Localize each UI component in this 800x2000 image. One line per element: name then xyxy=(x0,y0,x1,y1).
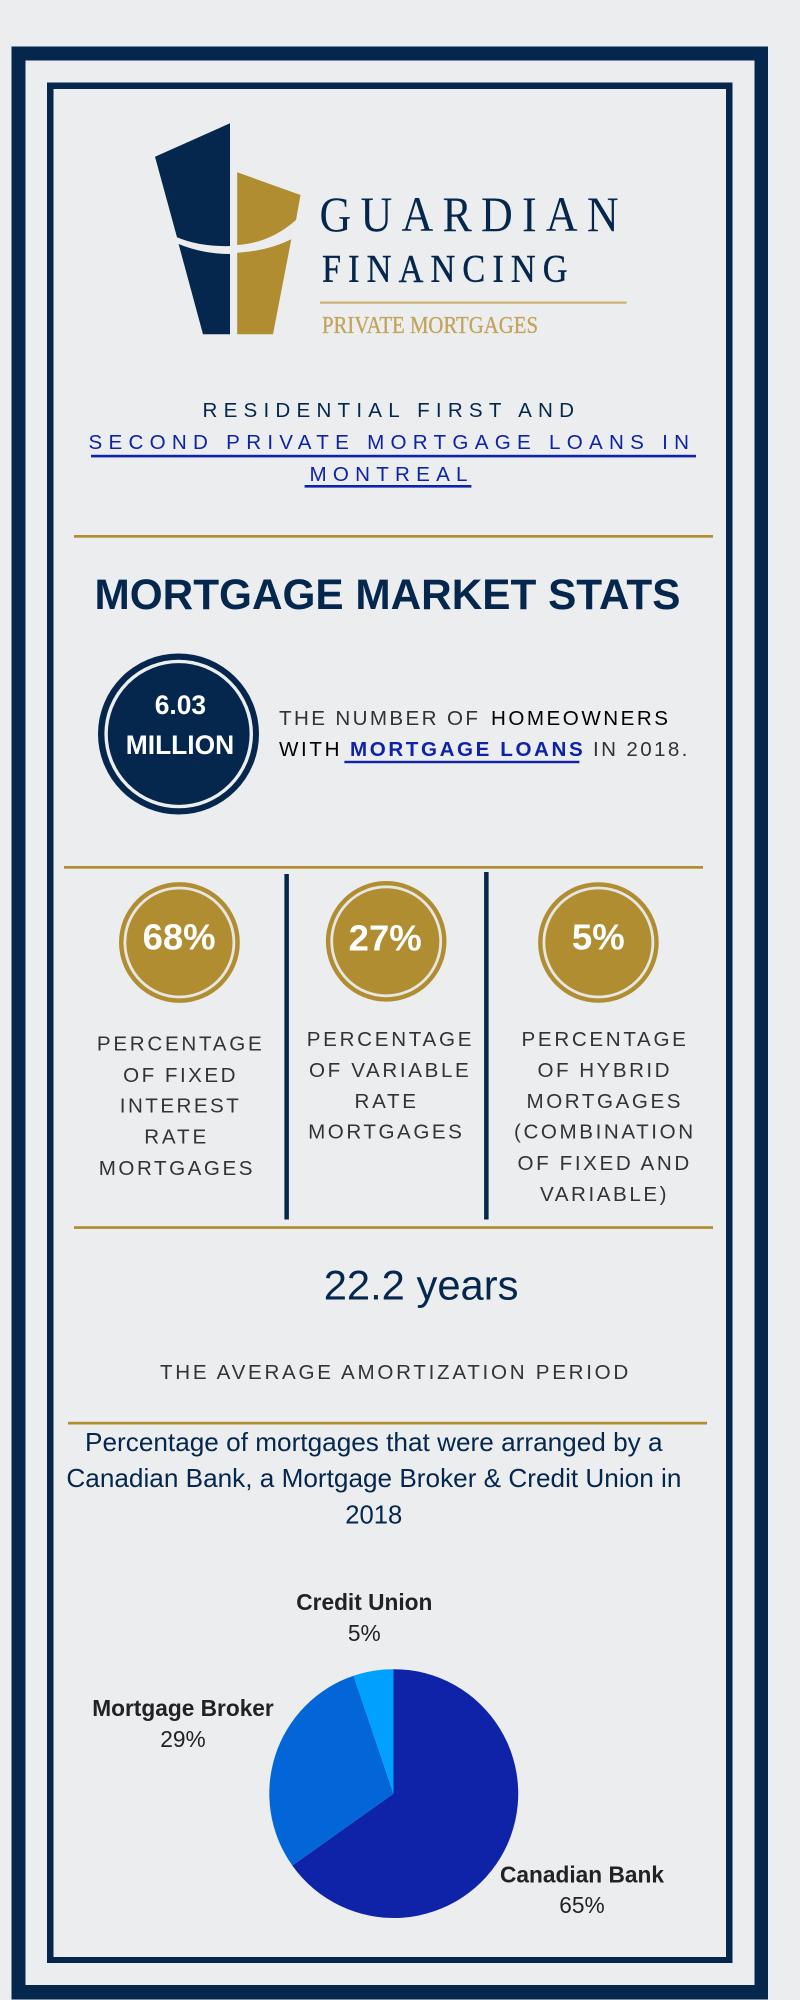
amortization value: 22.2 years xyxy=(324,1262,518,1309)
label: hybrid: (COMBINATION xyxy=(514,1121,693,1144)
label: hybrid: VARIABLE) xyxy=(540,1183,666,1206)
amortization stat xyxy=(160,1262,628,1384)
slice: Canadian Bank 65% xyxy=(292,1669,518,1918)
link: mortgage loans: MORTGAGE LOANS xyxy=(350,738,583,761)
pie label: Canadian Bank: Canadian Bank xyxy=(500,1861,664,1887)
label: hybrid: OF FIXED AND xyxy=(518,1152,689,1175)
column: hybrid xyxy=(514,882,693,1206)
homeowners stat text xyxy=(279,707,687,763)
badge: 68%: 68% xyxy=(143,916,216,957)
label: fixed rate: PERCENTAGE xyxy=(97,1033,262,1056)
label: fixed rate: INTEREST xyxy=(120,1095,239,1118)
stat text emphasis: HOMEOWNERS xyxy=(491,707,668,730)
amortization caption: THE AVERAGE AMORTIZATION PERIOD xyxy=(160,1361,628,1384)
logo wordmark: Financing: FINANCING xyxy=(322,247,568,290)
label: variable rate: PERCENTAGE xyxy=(307,1028,472,1051)
pie chart description: Canadian Bank, a Mortgage Broker & Credit Union in xyxy=(66,1463,681,1493)
label: variable rate: OF VARIABLE xyxy=(309,1059,469,1082)
pie label: Canadian Bank: 65% xyxy=(559,1892,605,1918)
subtitle xyxy=(88,399,696,488)
logo wordmark: Guardian: GUARDIAN xyxy=(320,187,619,243)
badge: 27% xyxy=(326,881,447,1002)
label: fixed rate xyxy=(97,1033,262,1180)
pie chart description: 2018 xyxy=(345,1500,402,1530)
badge: 5% xyxy=(538,882,659,1003)
badge: 68% xyxy=(119,882,240,1003)
heading: mortgage market stats: MORTGAGE MARKET STATS xyxy=(94,571,680,619)
subtitle link line 2: SECOND PRIVATE MORTGAGE LOANS IN xyxy=(88,431,689,454)
pie label: Mortgage Broker: Mortgage Broker xyxy=(92,1695,274,1721)
pie label: Credit Union: Credit Union xyxy=(296,1589,432,1615)
pie label: Mortgage Broker xyxy=(92,1695,274,1752)
link underline 3 xyxy=(305,485,471,488)
pie label: Credit Union xyxy=(296,1589,432,1646)
badge: 5%: 5% xyxy=(572,916,625,957)
badge unit: MILLION xyxy=(126,730,234,760)
column: variable rate xyxy=(307,881,472,1144)
icon: gold lower shard xyxy=(237,239,291,334)
stat badge: 6.03 million xyxy=(98,654,259,814)
icon: gold upper shard xyxy=(237,172,300,245)
stat text end: IN 2018. xyxy=(593,738,687,761)
pie label: Mortgage Broker: 29% xyxy=(160,1726,206,1752)
slice: Credit Union 5% xyxy=(354,1669,394,1794)
subtitle link line 3: MONTREAL xyxy=(310,463,468,486)
link underline 2 xyxy=(91,455,696,457)
stat text line 2: WITH xyxy=(279,738,340,761)
subtitle line 1: RESIDENTIAL FIRST AND xyxy=(202,399,574,422)
pie chart xyxy=(269,1669,518,1918)
logo tagline: PRIVATE MORTGAGES xyxy=(322,313,538,339)
slice: Mortgage Broker 29% xyxy=(269,1676,394,1866)
label: fixed rate: OF FIXED xyxy=(123,1064,236,1087)
stat text line 1: THE NUMBER OF xyxy=(279,707,478,730)
badge: 27%: 27% xyxy=(349,918,422,959)
icon: navy lower shard xyxy=(179,244,230,334)
pie chart description xyxy=(66,1427,681,1530)
label: hybrid: OF HYBRID xyxy=(538,1059,670,1082)
label: variable rate: RATE xyxy=(354,1090,416,1113)
pie chart description: Percentage of mortgages that were arranged by a xyxy=(85,1427,663,1457)
label: fixed rate: RATE xyxy=(144,1126,206,1149)
badge value: 6.03 xyxy=(155,690,206,720)
label: variable rate xyxy=(307,1028,472,1144)
logo rule xyxy=(320,302,626,304)
label: hybrid xyxy=(514,1028,693,1206)
label: fixed rate: MORTGAGES xyxy=(99,1157,252,1180)
pie label: Credit Union: 5% xyxy=(348,1620,381,1646)
logo: Guardian Financing xyxy=(155,123,626,339)
pie label: Canadian Bank xyxy=(500,1861,664,1918)
column: fixed rate xyxy=(97,882,262,1180)
label: variable rate: MORTGAGES xyxy=(308,1121,462,1144)
label: hybrid: PERCENTAGE xyxy=(522,1028,686,1051)
link underline xyxy=(344,761,579,763)
label: hybrid: MORTGAGES xyxy=(526,1090,680,1113)
icon: navy upper shard xyxy=(155,123,230,246)
